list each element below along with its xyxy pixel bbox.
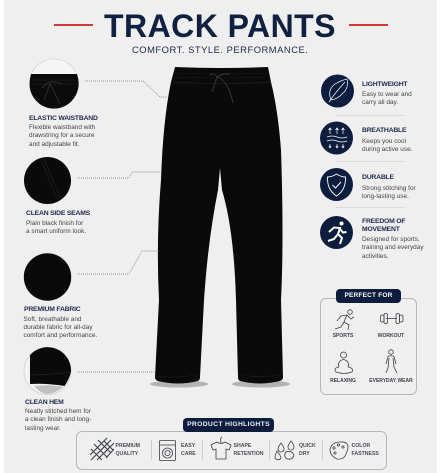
text: fabric description: comfort and performance. <box>24 332 97 339</box>
heading: premium fabric: PREMIUM FABRIC <box>24 306 80 313</box>
heading: breathable: BREATHABLE <box>362 127 406 134</box>
text: breathable description <box>362 138 412 153</box>
heading: elastic waistband: ELASTIC WAISTBAND <box>29 115 98 122</box>
text: durable description: long-lasting use. <box>362 193 409 200</box>
icon: waistband detail circle <box>29 58 79 109</box>
icons: highlights <box>90 436 348 461</box>
text: freedom description: activities. <box>362 253 388 260</box>
text: hem description: Neatly stitched hem for <box>25 408 91 415</box>
label: quick dry: DRY <box>299 451 310 457</box>
text: elastic waistband description: Flexible waistband with <box>29 124 95 131</box>
label: everyday wear: EVERYDAY WEAR <box>369 378 413 384</box>
panel: product highlights <box>76 431 387 470</box>
label: sports: SPORTS <box>333 333 353 339</box>
heading: freedom of movement: FREEDOM OF <box>362 218 405 224</box>
badge: product highlights <box>183 418 274 432</box>
icon: lightweight feather <box>321 74 354 108</box>
badge: product highlights: PRODUCT HIGHLIGHTS <box>187 421 270 428</box>
subtitle: COMFORT. STYLE. PERFORMANCE. <box>132 44 308 55</box>
text: hem description <box>25 408 91 432</box>
label: relaxing: RELAXING <box>330 378 356 384</box>
icon: durable shield <box>320 168 353 201</box>
text: hem description: lasting wear. <box>25 425 61 432</box>
label: shape retention <box>234 443 264 457</box>
label: easy care: CARE <box>181 451 196 457</box>
panel: perfect for <box>320 298 417 395</box>
label: shape retention: RETENTION <box>234 451 263 457</box>
icon: freedom of movement runner <box>320 216 353 249</box>
heading: freedom of movement: MOVEMENT <box>362 226 400 233</box>
badge: perfect for <box>336 289 401 303</box>
red rule left <box>54 24 93 26</box>
red rule right <box>349 24 388 26</box>
label: color fastness <box>352 443 379 457</box>
icon: side seams circle <box>24 157 71 204</box>
label: workout: WORKOUT <box>378 333 404 339</box>
text: side seams description <box>26 220 86 235</box>
text: lightweight description <box>362 91 412 106</box>
trousers illustration <box>150 67 290 388</box>
label: premium quality: PREMIUM <box>116 443 140 449</box>
text: durable description <box>362 184 416 200</box>
text: durable description: Strong stitching for <box>362 184 416 192</box>
text: fabric description: Soft, breathable and <box>24 316 81 322</box>
icon: fabric circle <box>24 253 72 301</box>
label: color fastness: COLOR <box>352 443 370 449</box>
text: freedom description: training and everyday <box>362 244 424 251</box>
label: easy care <box>181 443 196 457</box>
label: quick dry <box>299 443 316 457</box>
text: fabric description: durable fabric for all-day <box>24 324 93 331</box>
label: easy care: EASY <box>181 443 195 449</box>
text: side seams description: Plain black finish for <box>26 220 83 226</box>
label: shape retention: SHAPE <box>234 443 251 449</box>
icons: perfect for activities <box>334 309 404 374</box>
label: premium quality: QUALITY <box>116 451 138 457</box>
text: breathable description: Keeps you cool <box>362 138 406 145</box>
text: freedom description <box>362 236 424 260</box>
leader lines <box>77 80 167 372</box>
icon: hem circle <box>24 347 72 395</box>
label: color fastness: FASTNESS <box>352 451 379 457</box>
heading: clean hem: CLEAN HEM <box>25 399 64 406</box>
text: lightweight description: Easy to wear and <box>362 91 412 98</box>
text: fabric description <box>24 316 97 339</box>
heading: clean side seams: CLEAN SIDE SEAMS <box>26 210 90 217</box>
text: lightweight description: carry all day. <box>362 99 398 106</box>
title: TRACK PANTS <box>104 8 336 44</box>
text: side seams description: a smart uniform look. <box>26 228 86 235</box>
icon: breathable arrows <box>320 122 353 154</box>
text: elastic waistband description: drawstring for a secure <box>29 132 94 139</box>
text: freedom description: Designed for sports, <box>362 236 420 243</box>
text: hem description: a clean finish and long- <box>25 416 91 423</box>
heading: lightweight: LIGHTWEIGHT <box>362 80 407 88</box>
badge: perfect for: PERFECT FOR <box>344 292 393 299</box>
label: premium quality <box>116 443 140 457</box>
text: elastic waistband description <box>29 124 95 148</box>
text: elastic waistband description: and adjustable fit. <box>29 141 79 148</box>
heading: durable: DURABLE <box>362 174 394 180</box>
text: breathable description: during active use. <box>362 146 412 153</box>
label: quick dry: QUICK <box>299 443 316 449</box>
heading: freedom of movement <box>362 218 406 233</box>
